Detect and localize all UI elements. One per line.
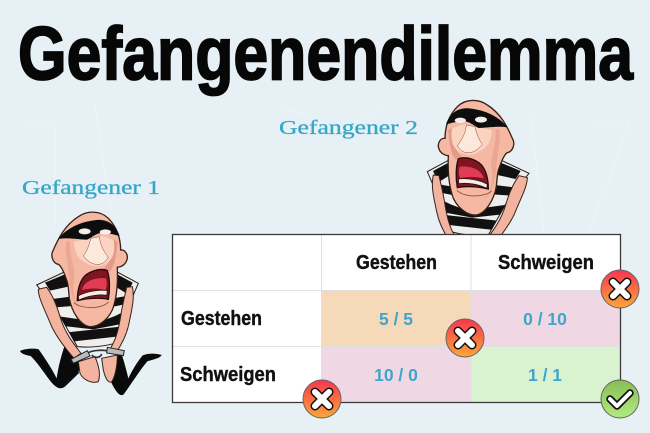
icon: cross centre [446,319,484,357]
row header: Schweigen: Schweigen [180,364,276,386]
cell: both confess [322,290,471,346]
column header: Gestehen: Gestehen [356,252,437,274]
character: prisoner 1 [20,212,162,395]
value 0/10: 0 / 10 [523,309,567,329]
icon: cross top right [601,270,639,308]
character: prisoner 2 [404,100,546,284]
value 1/1: 1 / 1 [528,365,562,385]
icon: check bottom right [601,380,639,418]
cell: both stay silent [471,346,621,402]
cell: prisoner 1 confesses alone [322,346,471,402]
value 10/0: 10 / 0 [374,365,418,385]
label: Gefangener 1: Gefangener 1 [22,177,160,199]
value 5/5: 5 / 5 [379,309,413,329]
label: Gefangener 2: Gefangener 2 [279,117,418,139]
icon: cross bottom left [303,380,341,418]
cell: prisoner 2 confesses alone [471,290,621,346]
row header: Gestehen: Gestehen [181,308,262,330]
column header: Schweigen: Schweigen [498,252,594,274]
payoff table [172,234,621,403]
